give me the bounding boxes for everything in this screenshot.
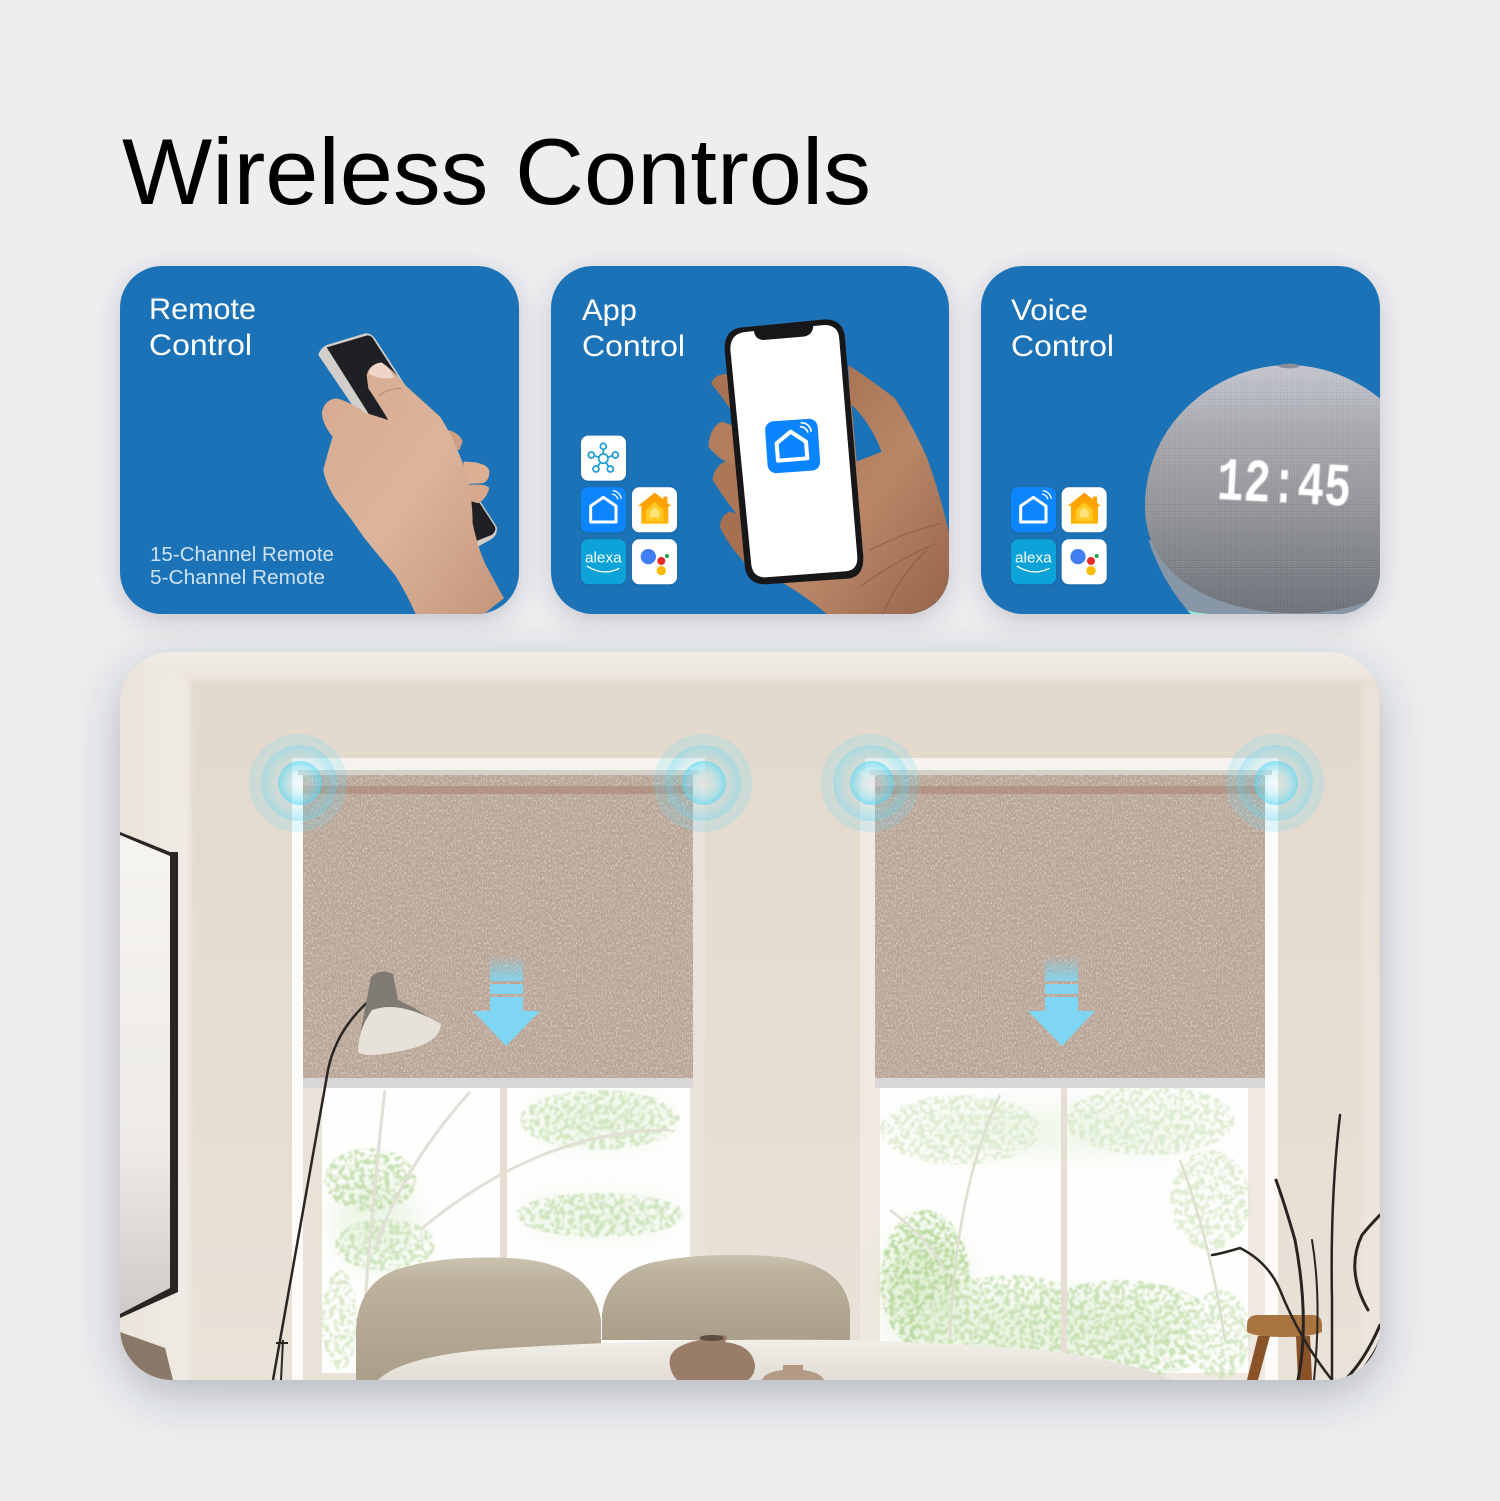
- icon: alexa: [581, 539, 626, 584]
- sofa: [356, 1255, 1172, 1380]
- signal rings: left shade right bracket: [654, 734, 752, 832]
- icon: smartphone: [725, 319, 863, 584]
- icon group: smart home apps: [581, 436, 677, 584]
- ceiling: [146, 652, 1374, 681]
- icon: google assistant: [1062, 539, 1107, 584]
- icon: hand behind phone: [708, 365, 950, 617]
- arrow: right shade down: [1028, 955, 1095, 1046]
- icon: smart life app on phone: [765, 418, 821, 474]
- clock display: 12:45: [1215, 448, 1353, 525]
- foliage: [885, 1105, 1210, 1365]
- branches: [1212, 1115, 1380, 1380]
- icon: google assistant: [632, 539, 677, 584]
- signal rings: right shade right bracket: [1226, 734, 1324, 832]
- icon: alexa: alexa: [1015, 551, 1053, 567]
- vases: [670, 1335, 824, 1380]
- heading: remote control: Remote: [149, 293, 256, 326]
- signal rings: right shade left bracket: [821, 734, 919, 832]
- left window: [292, 760, 705, 1380]
- panel: room photo with roller shades: [110, 640, 1380, 1390]
- panel: voice control: [981, 266, 1432, 617]
- signal rings: left shade left bracket: [249, 734, 347, 832]
- icon group: voice assistants: [1011, 487, 1107, 584]
- heading: voice control: Voice: [1011, 294, 1088, 327]
- heading: app control: App: [582, 294, 637, 327]
- right window: [860, 770, 1278, 1380]
- heading: app control: Control: [582, 330, 685, 363]
- left roller shade: [292, 758, 705, 1088]
- icon: smart life: [581, 487, 626, 532]
- panel: remote control: [120, 266, 519, 615]
- heading: voice control: Control: [1011, 330, 1114, 363]
- icon: smartthings: [581, 436, 626, 481]
- icon: apple home: [1062, 487, 1107, 532]
- icon: smart speaker: [1145, 364, 1380, 614]
- right roller shade: [865, 758, 1278, 1088]
- icon: smart life: [1011, 487, 1056, 532]
- side wall with picture: [120, 678, 191, 1380]
- icon: apple home: [632, 487, 677, 532]
- panel: app control: [551, 266, 950, 617]
- wooden stool: [1247, 1315, 1322, 1380]
- icon: hand holding remote: [318, 333, 504, 615]
- text: remote channel options: 15-Channel Remote: [150, 544, 334, 566]
- arrow: left shade down: [473, 955, 540, 1046]
- foliage: [335, 1098, 675, 1270]
- title: Wireless Controls: [122, 119, 871, 224]
- icon: alexa: alexa: [585, 551, 623, 567]
- text: remote channel options: 5-Channel Remote: [150, 567, 325, 589]
- floor lamp: [273, 972, 441, 1380]
- heading: remote control: Control: [149, 329, 252, 362]
